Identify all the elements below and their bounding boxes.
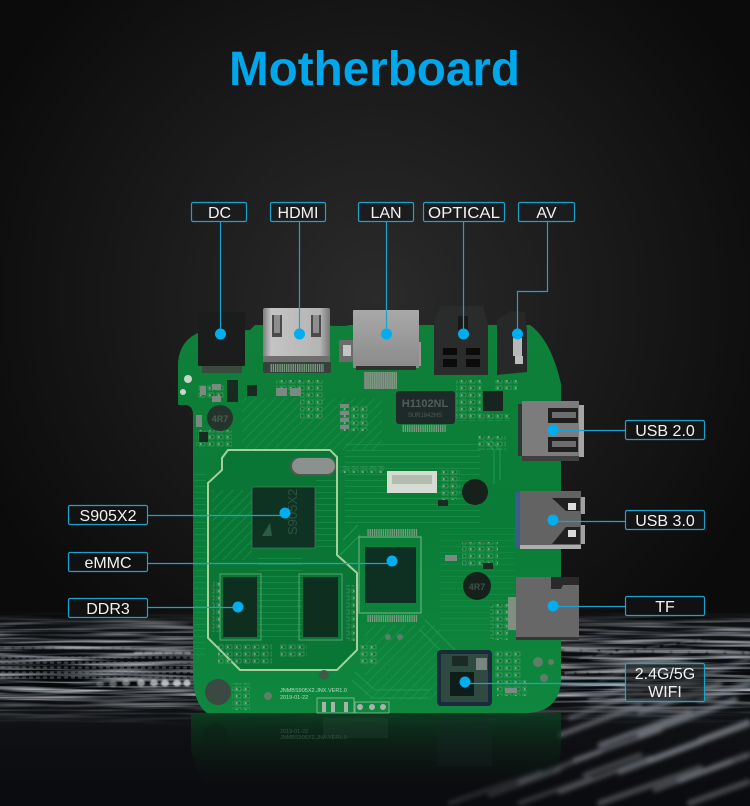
label: TF — [626, 596, 704, 616]
discrete parts — [196, 380, 517, 693]
connector: AV jack — [497, 311, 527, 375]
label: DC — [192, 202, 246, 222]
smd clusters — [196, 380, 527, 710]
label: DDR3 — [68, 598, 148, 618]
label: TF: TF — [655, 599, 675, 616]
callout lines — [147, 221, 625, 684]
board print text: JNMBS905X2.JNX.VER1.0 — [280, 688, 347, 694]
pcb outline — [178, 325, 561, 713]
cpu chip — [252, 487, 315, 548]
label: 2.4G/5G WIFI: 2.4G/5G — [635, 666, 695, 683]
transformer chip: H1102NL — [402, 398, 449, 410]
transformer chip: SUR1842HS — [408, 413, 442, 419]
marker dots — [215, 328, 558, 688]
label: AV — [518, 202, 574, 222]
connector: LAN — [339, 310, 421, 389]
connector: HDMI — [263, 308, 331, 373]
inductor — [205, 679, 231, 705]
label: USB 2.0: USB 2.0 — [635, 423, 695, 440]
label: eMMC — [68, 552, 148, 572]
title: Motherboard — [229, 43, 520, 96]
floor streak texture — [0, 612, 750, 806]
transformer chip — [396, 391, 455, 432]
board print text — [280, 688, 347, 701]
label: LAN: LAN — [370, 205, 402, 222]
label: LAN — [358, 202, 414, 222]
ddr chip right — [299, 574, 342, 640]
label: DDR3: DDR3 — [86, 601, 130, 618]
label: eMMC: eMMC — [84, 555, 132, 572]
label: USB 2.0 — [626, 420, 704, 440]
label: OPTICAL: OPTICAL — [428, 205, 500, 222]
inductor — [462, 479, 488, 505]
inductor: 4R7 — [212, 414, 228, 424]
label: HDMI: HDMI — [278, 205, 318, 222]
label: USB 3.0: USB 3.0 — [635, 513, 695, 530]
board reflection: JNMBS905X2.JNX.VER1.0 — [280, 735, 347, 741]
tf card slot — [508, 577, 579, 640]
bottom pin header — [317, 698, 389, 713]
board reflection — [191, 713, 561, 785]
connector: optical — [434, 306, 488, 375]
label: S905X2: S905X2 — [80, 508, 137, 525]
wifi module — [437, 650, 492, 706]
board reflection: 2019-01-22 — [280, 729, 308, 735]
ddr chip left — [220, 574, 261, 640]
small ic — [483, 391, 503, 411]
copper traces — [194, 398, 515, 700]
label: DC: DC — [208, 205, 231, 222]
white header connector — [387, 471, 437, 493]
board print text: 2019-01-22 — [280, 695, 308, 701]
crystal — [290, 457, 336, 476]
inductor — [463, 572, 491, 600]
label: USB 3.0 — [626, 510, 704, 530]
label: 2.4G/5G WIFI: WIFI — [648, 684, 682, 701]
memory shield zone — [208, 450, 357, 670]
label: HDMI — [270, 202, 326, 222]
shield zone traces — [212, 480, 336, 640]
connector: DC jack — [198, 312, 245, 373]
usb 2.0 port — [518, 401, 584, 461]
label: AV: AV — [536, 205, 557, 222]
emmc chip — [359, 529, 421, 622]
inductor — [207, 405, 233, 431]
label: 2.4G/5G WIFI — [626, 664, 704, 702]
mounting holes — [180, 375, 554, 700]
circuit board — [178, 306, 585, 713]
label: S905X2 — [68, 506, 148, 525]
usb 3.0 port — [515, 491, 585, 549]
inductor: 4R7 — [469, 582, 485, 592]
cpu chip: S905X2 — [285, 489, 300, 535]
